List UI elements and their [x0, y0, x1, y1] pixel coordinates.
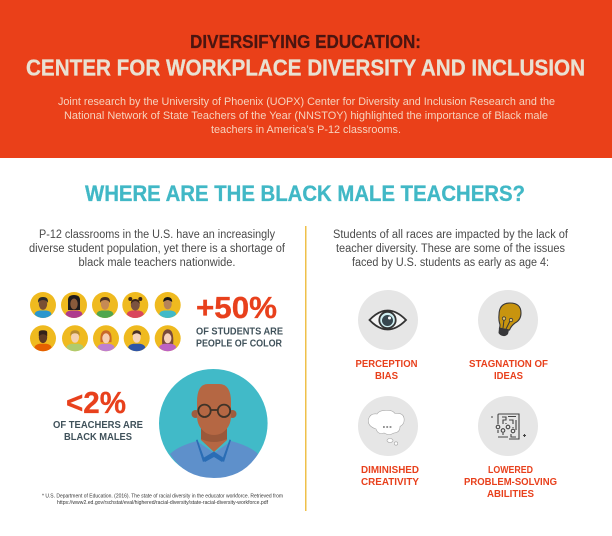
intro text: Joint research by the University of Phoenix (UOPX) Center for Diversity and Inclusion Research and the — [58, 96, 555, 108]
student 6 — [30, 325, 56, 351]
left intro text: black male teachers nationwide. — [78, 257, 236, 269]
title line 1: DIVERSIFYING EDUCATION: — [190, 31, 421, 52]
icon: thought cloud — [368, 410, 404, 445]
student 5 — [155, 292, 181, 318]
left intro text: P-12 classrooms in the U.S. have an increasingly — [39, 229, 275, 241]
stat: <2% — [53, 385, 143, 443]
left intro text: diverse student population, yet there is a shortage of — [29, 243, 286, 255]
right intro text: teacher diversity. These are some of the issues — [336, 243, 565, 255]
footnote: https://www2.ed.gov/rschstat/eval/highered/racial-diversity/state-racial-diversity-workforce.pdf — [57, 500, 269, 506]
issue: lowered problem-solving abilities: LOWERED — [488, 465, 533, 476]
issue: perception bias: BIAS — [375, 371, 398, 382]
stat caption: BLACK MALES — [64, 432, 132, 443]
stat caption: PEOPLE OF COLOR — [196, 338, 283, 350]
stat: +50% — [196, 290, 283, 350]
intro text: National Network of State Teachers of the Year (NNSTOY) highlighted the importance of Black male — [64, 110, 548, 122]
icon: eye — [370, 310, 406, 330]
student 2 — [61, 292, 87, 318]
footnote — [42, 494, 283, 506]
student 3 — [92, 292, 118, 318]
footnote: * U.S. Department of Education. (2016). The state of racial diversity in the educator workforce. Retrieved from — [42, 494, 283, 500]
intro text — [58, 96, 555, 136]
stat: +50%: +50% — [196, 290, 277, 325]
right intro text: faced by U.S. students as early as age 4: — [352, 257, 549, 269]
header banner — [0, 0, 612, 158]
issue: stagnation of ideas: STAGNATION OF — [469, 359, 548, 370]
right intro text: Students of all races are impacted by the lack of — [333, 229, 569, 241]
stat caption — [196, 326, 283, 350]
issue: diminished creativity: DIMINISHED — [361, 465, 419, 476]
left intro text — [29, 229, 286, 269]
student 8 — [93, 325, 119, 351]
intro text: teachers in America’s P-12 classrooms. — [211, 124, 401, 136]
issue: lowered problem-solving abilities: PROBLEM-SOLVING — [464, 477, 557, 488]
stat caption: OF TEACHERS ARE — [53, 420, 143, 431]
right intro text — [333, 229, 569, 269]
issue: stagnation of ideas — [469, 290, 548, 382]
issue: diminished creativity: CREATIVITY — [361, 477, 419, 488]
student 7 — [62, 325, 88, 351]
issue: perception bias — [356, 290, 418, 382]
stat caption — [53, 420, 143, 443]
student 1 — [30, 292, 56, 318]
issue: lowered problem-solving abilities: ABILITIES — [487, 489, 534, 500]
student 10 — [155, 325, 181, 351]
student 4 — [122, 292, 148, 318]
icon: circuit maze — [491, 414, 526, 439]
stat caption: OF STUDENTS ARE — [196, 326, 283, 338]
teacher portrait — [159, 369, 268, 478]
divider — [305, 226, 306, 511]
stat: <2%: <2% — [66, 385, 126, 420]
issue: perception bias: PERCEPTION — [356, 359, 418, 370]
student 9 — [124, 325, 150, 351]
issue: stagnation of ideas: IDEAS — [494, 371, 523, 382]
issue: lowered problem-solving abilities — [464, 396, 557, 500]
student icons grid — [30, 292, 181, 351]
issue: diminished creativity — [358, 396, 419, 488]
section heading: WHERE ARE THE BLACK MALE TEACHERS? — [85, 181, 525, 206]
icon: light bulb — [498, 303, 521, 336]
